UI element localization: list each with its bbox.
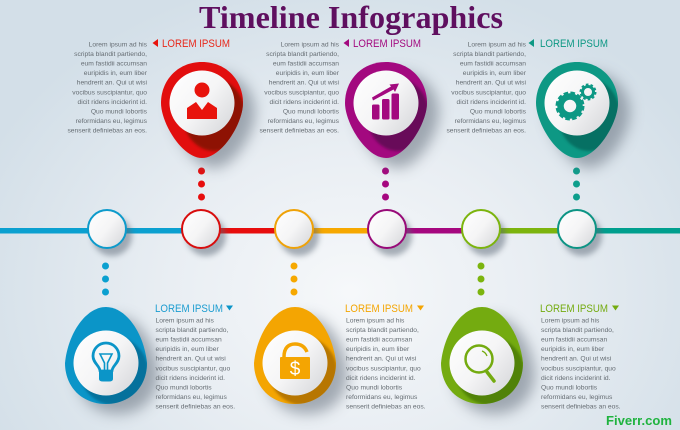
text block: bottom right: senserit definiebas an eos.	[541, 404, 621, 411]
text block: bottom left: dicit ridens inciderint id.	[156, 375, 225, 382]
connector dots: teal	[573, 168, 580, 200]
text block: top left: euripidis in, eum liber	[84, 70, 148, 77]
connector dots: red	[198, 168, 205, 200]
node: purple	[368, 210, 412, 256]
text block: top left: eum fastidii accumsan	[81, 61, 147, 68]
text block: top right: vocibus suscipiantur, quo	[451, 89, 526, 96]
text block: bottom middle: hendrerit an. Qui ut wisi	[346, 356, 417, 363]
icon: gears	[557, 84, 596, 119]
title: Timeline Infographics	[199, 0, 503, 35]
text block: bottom right: eum fastidii accumsan	[541, 337, 607, 344]
text block: top left: Lorem ipsum ad his	[89, 42, 148, 48]
text block: bottom middle: Quo mundi lobortis	[346, 384, 403, 391]
icon: open padlock with dollar sign: $	[290, 359, 301, 380]
panel: blue pin	[65, 307, 159, 414]
text block: top middle: hendrerit an. Qui ut wisi	[269, 80, 340, 87]
text block: top middle: reformidans eu, legimus	[268, 118, 340, 125]
text block: bottom left: vocibus suscipiantur, quo	[156, 365, 231, 372]
watermark: Fiverr.com	[606, 413, 672, 428]
text block: bottom middle: Lorem ipsum ad his	[346, 318, 405, 324]
icon: magnifier	[466, 346, 494, 381]
timeline	[0, 210, 680, 256]
text block: top right: Lorem ipsum ad his	[468, 42, 527, 48]
text block: top right: eum fastidii accumsan	[460, 61, 526, 68]
text block: bottom left: euripidis in, eum liber	[156, 346, 219, 353]
heading: purple: LOREM IPSUM	[353, 38, 421, 50]
text block: bottom right: vocibus suscipiantur, quo	[541, 365, 616, 372]
text block: top middle: Lorem ipsum ad his	[281, 42, 340, 48]
connector dots: blue	[102, 262, 109, 296]
node: teal	[558, 210, 602, 256]
heading: teal: LOREM IPSUM	[540, 38, 608, 50]
heading: orange: LOREM IPSUM	[345, 303, 413, 315]
text block: top right: senserit definiebas an eos.	[446, 128, 526, 135]
text block: bottom left: hendrerit an. Qui ut wisi	[156, 356, 226, 363]
text block: top middle: euripidis in, eum liber	[276, 70, 340, 77]
text block: bottom left: eum fastidii accumsan	[156, 337, 222, 344]
text block: top right: scripta blandit partiendo,	[453, 51, 526, 58]
text block: bottom right: reformidans eu, legimus	[541, 394, 613, 401]
connector dots: green	[478, 262, 484, 296]
text block: top left: senserit definiebas an eos.	[67, 128, 147, 135]
text block: bottom middle: reformidans eu, legimus	[346, 394, 418, 401]
connector dots: orange	[290, 262, 298, 296]
text block: bottom right: Quo mundi lobortis	[541, 384, 598, 391]
text block: bottom middle: dicit ridens inciderint id.	[346, 375, 416, 382]
text block: top middle: vocibus suscipiantur, quo	[264, 89, 339, 96]
text block: top left: Quo mundi lobortis	[91, 108, 148, 115]
text block: bottom left: reformidans eu, legimus	[156, 394, 228, 401]
connector dots: purple	[382, 168, 389, 200]
text block: top right: Quo mundi lobortis	[470, 108, 527, 115]
text block: top middle: senserit definiebas an eos.	[259, 128, 339, 135]
text block: bottom middle: euripidis in, eum liber	[346, 346, 410, 353]
node: green	[462, 210, 506, 256]
node: blue	[88, 210, 132, 256]
icon: person	[187, 82, 217, 119]
heading: red: LOREM IPSUM	[162, 38, 230, 50]
text block: top middle: eum fastidii accumsan	[273, 61, 339, 68]
text block: bottom right: Lorem ipsum ad his	[541, 318, 600, 324]
text block: top left: vocibus suscipiantur, quo	[72, 89, 147, 96]
text block: bottom left: scripta blandit partiendo,	[156, 327, 229, 334]
panel: red pin	[161, 62, 255, 168]
heading: blue: LOREM IPSUM	[155, 303, 223, 315]
text block: top right: reformidans eu, legimus	[455, 118, 527, 125]
text block: top middle: dicit ridens inciderint id.	[269, 99, 339, 106]
text block: bottom left: senserit definiebas an eos.	[156, 404, 235, 411]
text block: bottom left: Lorem ipsum ad his	[156, 318, 215, 324]
icon: bar chart with arrow	[372, 84, 399, 120]
text block: top right: euripidis in, eum liber	[463, 70, 527, 77]
panel: orange pin	[254, 307, 348, 414]
panel: purple pin	[345, 62, 439, 168]
text block: bottom right: scripta blandit partiendo,	[541, 327, 614, 334]
text block: bottom right: euripidis in, eum liber	[541, 346, 605, 353]
text block: bottom right: hendrerit an. Qui ut wisi	[541, 356, 612, 363]
panel: green pin	[441, 307, 535, 414]
text block: top left: dicit ridens inciderint id.	[77, 99, 147, 106]
panel: teal pin	[536, 62, 630, 168]
text block: bottom left: Quo mundi lobortis	[156, 384, 212, 391]
heading: green: LOREM IPSUM	[540, 303, 608, 315]
text block: bottom right: dicit ridens inciderint id.	[541, 375, 611, 382]
text block: bottom middle: eum fastidii accumsan	[346, 337, 412, 344]
text block: top middle: Quo mundi lobortis	[283, 108, 340, 115]
text block: top left: scripta blandit partiendo,	[74, 51, 147, 58]
text block: bottom middle: vocibus suscipiantur, quo	[346, 365, 421, 372]
node: orange	[275, 210, 319, 256]
text block: top left: reformidans eu, legimus	[76, 118, 148, 125]
text block: top right: dicit ridens inciderint id.	[456, 99, 526, 106]
node: red	[182, 210, 226, 256]
text block: top middle: scripta blandit partiendo,	[266, 51, 339, 58]
text block: top left: hendrerit an. Qui ut wisi	[77, 80, 148, 87]
text block: bottom middle: senserit definiebas an eos.	[346, 404, 426, 411]
text block: top right: hendrerit an. Qui ut wisi	[456, 80, 526, 87]
text block: bottom middle: scripta blandit partiendo,	[346, 327, 419, 334]
icon: light bulb	[93, 343, 119, 382]
